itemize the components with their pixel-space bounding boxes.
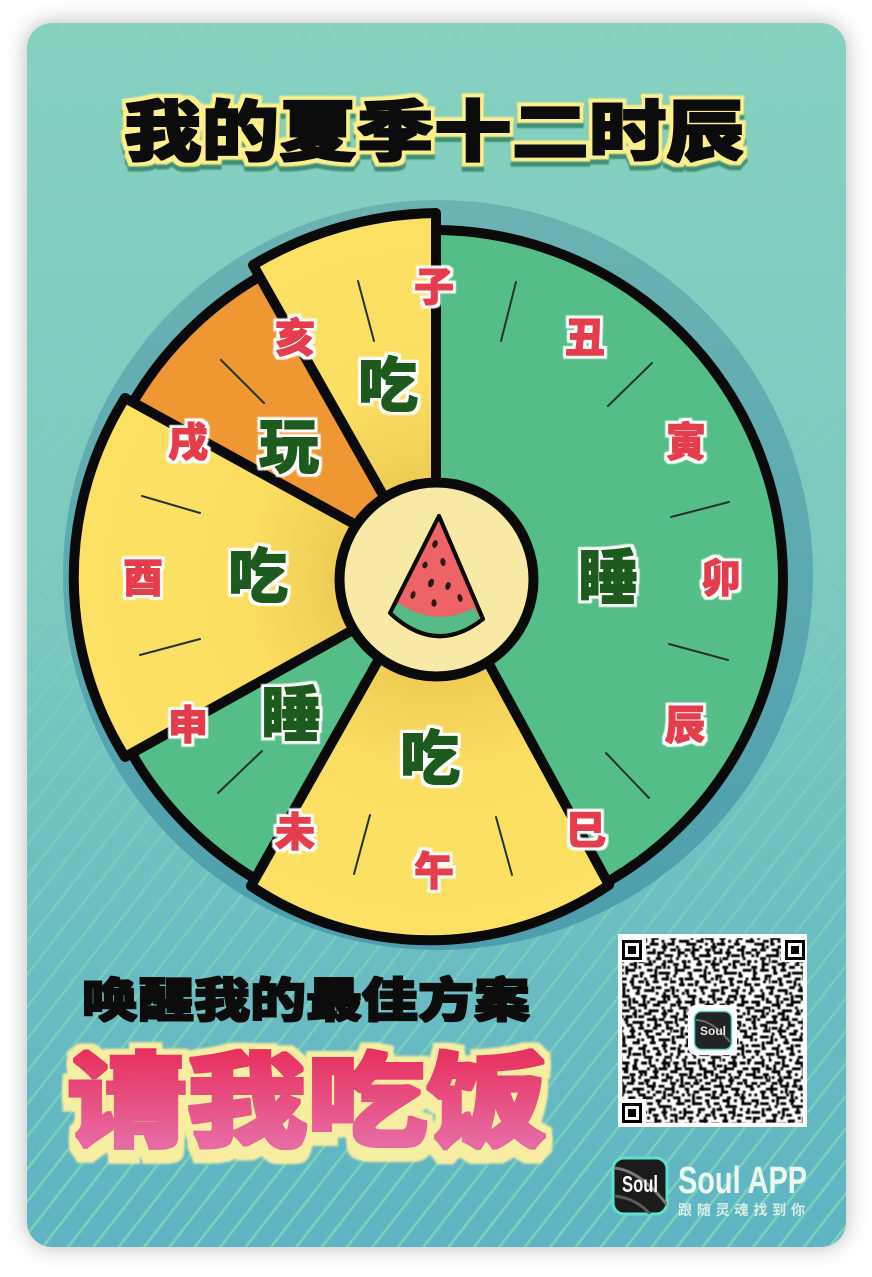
activity labels: 吃 (358, 353, 418, 420)
hour tick marks (140, 281, 729, 875)
earthly branch labels: 子 (414, 266, 454, 310)
Soul app logo (613, 1158, 668, 1214)
activity labels: 吃 (400, 726, 460, 793)
sector: play, orange (133, 276, 400, 541)
sector: eat, left yellow (74, 398, 385, 757)
Soul app logo: Soul (622, 1171, 658, 1197)
wheel outer rim (85, 230, 783, 928)
earthly branch labels: 寅 (666, 420, 706, 465)
tagline: 跟随灵魂找到你 (678, 1202, 805, 1218)
activity labels: 玩 (259, 414, 319, 481)
sector: eat, bottom yellow (251, 620, 609, 940)
icon: watermelon slice (390, 516, 483, 636)
sector: eat, top yellow (253, 213, 436, 525)
earthly branch labels: 丑 (565, 317, 605, 361)
center hub (340, 482, 534, 676)
subheading: 唤醒我的最佳方案 (82, 974, 530, 1027)
earthly branch labels (123, 266, 741, 894)
QR finder squares (619, 935, 807, 1126)
main call to action: 请我吃饭 (67, 1046, 547, 1160)
QR code (618, 934, 807, 1127)
activity labels: 睡 (578, 545, 638, 612)
title: 我的夏季十二时辰 (124, 95, 744, 169)
activity labels: 吃 (228, 544, 288, 611)
earthly branch labels: 亥 (275, 316, 315, 361)
sector: sleep, large green base (85, 230, 783, 928)
QR center logo: Soul (700, 1024, 726, 1038)
earthly branch labels: 午 (414, 850, 454, 894)
wheel backing ring (63, 200, 813, 950)
QR center logo (688, 1005, 737, 1055)
activity labels (228, 353, 638, 793)
earthly branch labels: 酉 (123, 557, 163, 601)
earthly branch labels: 未 (275, 811, 315, 855)
earthly branch labels: 卯 (701, 557, 741, 601)
earthly branch labels: 戌 (168, 421, 208, 465)
Soul APP wordmark: Soul APP (678, 1160, 807, 1202)
earthly branch labels: 申 (168, 704, 208, 748)
earthly branch labels: 辰 (665, 704, 705, 748)
activity labels: 睡 (261, 682, 321, 749)
earthly branch labels: 巳 (566, 809, 606, 853)
wheel chart: twelve double-hours (63, 200, 813, 950)
